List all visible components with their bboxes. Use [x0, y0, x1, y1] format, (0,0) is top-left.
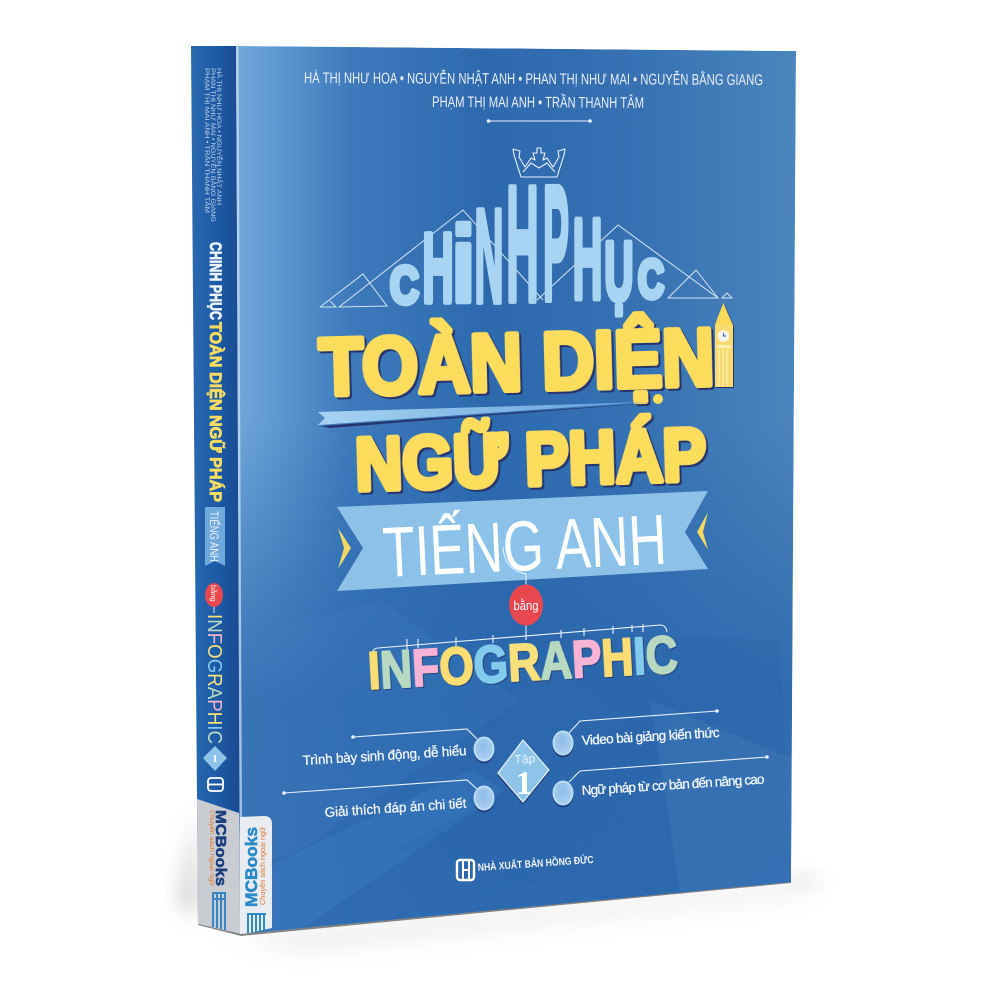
- tab slogan: Chuyên sách ngoại ngữ: [260, 827, 267, 905]
- feature texts: Ngữ pháp từ cơ bản đến nâng cao: [581, 772, 765, 798]
- authors: PHẠM THỊ MAI ANH • TRẦN THANH TÂM: [432, 94, 644, 112]
- spine title: [206, 242, 226, 502]
- title: TOAN DIEN: TOÀN DIỆN: [318, 312, 715, 413]
- spine authors: PHAN THỊ NHƯ MAI • NGUYỄN BẰNG GIANG: [209, 68, 218, 222]
- spine title: TOÀN DIỆN NGỮ PHÁP: [206, 322, 226, 502]
- title: CHINH PHUC: H: [422, 214, 454, 322]
- title: CHINH PHUC: i: [452, 204, 475, 325]
- authors divider: [487, 119, 592, 123]
- publisher logo: [457, 859, 474, 881]
- cover lower tint: [238, 461, 794, 934]
- feature texts: Video bài giảng kiến thức: [581, 725, 720, 748]
- feature texts: Giải thích đáp án chi tiết: [324, 796, 467, 820]
- banner text: TIẾNG ANH: [381, 501, 668, 593]
- tab logo: MCBooks: [242, 827, 261, 907]
- spine authors: PHẠM THỊ MAI ANH • TRẦN THANH TÂM: [203, 68, 213, 213]
- mountains outline: [320, 210, 732, 307]
- spine red badge: [205, 583, 223, 613]
- title: NGU PHAP: NGỮ PHÁP: [354, 413, 707, 506]
- spine volume diamond: [203, 746, 227, 771]
- spine McBooks logo: Chuyên sách ngoại ngữ: [208, 810, 215, 887]
- authors: [304, 69, 763, 112]
- title: CHINH PHUC: C: [390, 256, 419, 314]
- book mockup: [172, 46, 815, 950]
- cover background: [236, 46, 796, 934]
- banner shape: [337, 491, 708, 591]
- spine red badge: bằng: [209, 585, 218, 602]
- spine McBooks logo: MCBooks: [212, 810, 229, 886]
- spine ribbon: [205, 507, 225, 566]
- title: CHINH PHUC: H: [573, 197, 602, 323]
- spine McBooks logo: [208, 810, 229, 930]
- spine hinge highlight: [236, 46, 242, 934]
- feature texts: [302, 725, 765, 820]
- authors: HÀ THỊ NHƯ HOA • NGUYỄN NHẬT ANH • PHAN THỊ NHƯ MAI • NGUYỄN BẰNG GIANG: [304, 69, 763, 89]
- cover facets: [332, 758, 792, 896]
- icon: Big Ben tower: [715, 303, 733, 387]
- badge: bang: bằng: [514, 598, 538, 613]
- volume diamond: Tập: [514, 751, 536, 767]
- spine publisher logo: [208, 778, 223, 791]
- title: CHINH PHUC: C: [638, 248, 664, 309]
- icon: crown: [513, 148, 565, 177]
- spine authors: [203, 68, 224, 222]
- title: CHINH PHUC: Ụ: [605, 224, 633, 317]
- tab shape: [240, 816, 272, 935]
- spine title: CHINH PHỤC: [206, 242, 225, 320]
- tab stripes: [247, 913, 266, 933]
- ribbon divider: [318, 394, 663, 428]
- volume diamond: [498, 740, 549, 802]
- ground shadow: [178, 810, 825, 950]
- feature lines: [282, 709, 769, 795]
- front cover: [236, 46, 796, 935]
- publisher name: NHÀ XUẤT BẢN HỒNG ĐỨC: [477, 853, 594, 874]
- spine authors: HÀ THỊ NHƯ HOA • NGUYỄN NHẬT ANH: [215, 68, 224, 205]
- cover corner tab: McBooks: [240, 816, 272, 935]
- connector: G to badge: [503, 547, 526, 640]
- volume diamond: 1: [516, 765, 532, 802]
- banner: TIENG ANH: [337, 491, 708, 593]
- spine grey footer: [197, 799, 241, 934]
- spine infographic word: I N F O G R A P H I C: [203, 614, 225, 744]
- feature bullet circles: [474, 732, 572, 810]
- spine: [191, 46, 241, 934]
- badge: bang: [509, 584, 543, 626]
- spine face: [191, 46, 241, 934]
- infographic wires: [372, 624, 668, 652]
- spine ribbon: TIẾNG ANH: [207, 511, 222, 562]
- title: CHINH PHUC: N: [475, 182, 503, 330]
- title: CHINH PHUC: H: [506, 153, 539, 336]
- title: CHINH PHUC: P: [543, 154, 569, 335]
- spine volume diamond: 1: [212, 753, 218, 765]
- title: CHINH PHUC: [390, 184, 665, 318]
- feature texts: Trình bày sinh động, dễ hiểu: [302, 743, 467, 768]
- word: INFOGRAPHIC: INFOGRAPHIC: [366, 625, 679, 701]
- chevrons: [338, 528, 351, 569]
